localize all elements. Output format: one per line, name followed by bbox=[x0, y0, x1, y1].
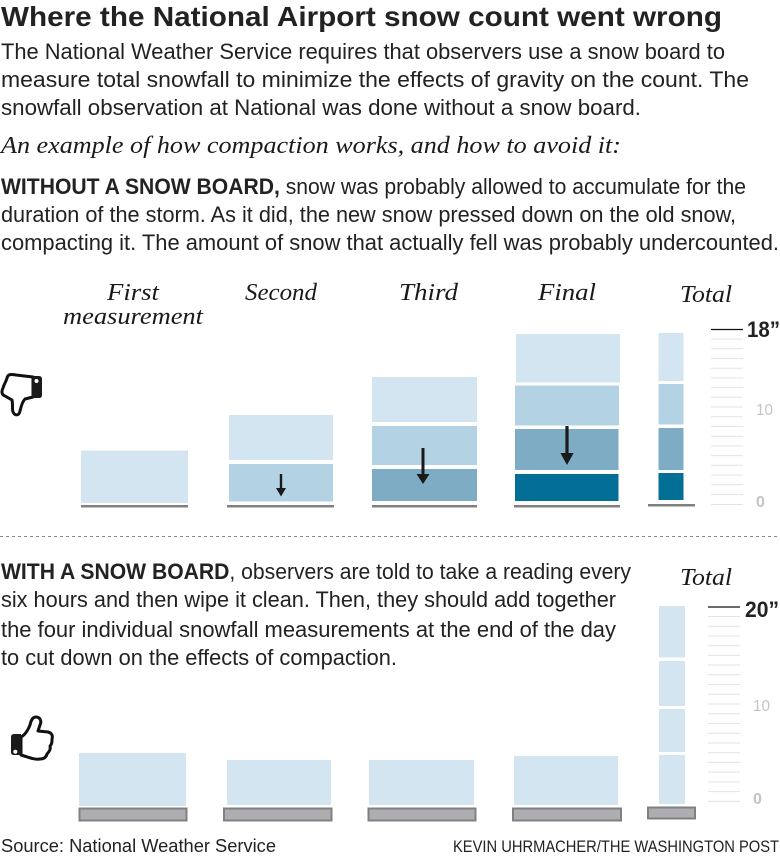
arrow: third compaction bbox=[416, 448, 430, 484]
with a snow board text bbox=[1, 559, 631, 670]
intro text: measure total snowfall to minimize the effects of gravity on the count. The bbox=[1, 67, 749, 92]
chart: first measurement bbox=[81, 450, 188, 508]
column headings bbox=[63, 280, 732, 330]
scale: 20 inches: 10 bbox=[753, 698, 770, 715]
total heading: Total bbox=[680, 565, 732, 591]
intro text: The National Weather Service requires that observers use a snow board to bbox=[1, 39, 725, 64]
column headings: Total bbox=[680, 282, 732, 308]
with a snow board text: to cut down on the effects of compaction. bbox=[1, 645, 397, 670]
column headings: Third bbox=[399, 280, 459, 306]
title: Where the National Airport snow count went wrong bbox=[1, 1, 722, 32]
without a snow board text bbox=[1, 174, 779, 255]
scale: 20 inches bbox=[708, 597, 779, 808]
chart: final measurement bbox=[514, 334, 620, 508]
without a snow board text: WITHOUT A SNOW BOARD, snow was probably allowed to accumulate for the bbox=[1, 174, 746, 199]
scale: 20 inches: 20” bbox=[745, 597, 779, 622]
with a snow board text: WITH A SNOW BOARD, observers are told to take a reading every bbox=[1, 559, 631, 584]
column headings: Second bbox=[245, 280, 318, 306]
without a snow board text: duration of the storm. As it did, the new snow pressed down on the old snow, bbox=[1, 202, 736, 227]
chart: snow board measurements bbox=[79, 753, 621, 820]
column headings: Final bbox=[537, 280, 596, 306]
icon: thumbs up bbox=[11, 717, 52, 759]
subheading: An example of how compaction works, and how to avoid it: bbox=[0, 133, 621, 159]
without a snow board text: compacting it. The amount of snow that actually fell was probably undercounted. bbox=[1, 230, 779, 255]
scale: 18 inches: 0 bbox=[756, 494, 765, 511]
scale: 18 inches bbox=[711, 317, 780, 511]
scale: 18 inches: 10 bbox=[756, 402, 773, 419]
chart: second measurement bbox=[227, 415, 334, 508]
intro text bbox=[1, 39, 749, 120]
chart: total without snow board bbox=[648, 333, 695, 506]
scale: 20 inches: 0 bbox=[753, 791, 762, 808]
icon: thumbs down bbox=[2, 374, 42, 415]
arrow: second compaction bbox=[276, 474, 286, 496]
column headings: First bbox=[106, 280, 160, 306]
column headings: measurement bbox=[63, 304, 204, 330]
with a snow board text: six hours and then wipe it clean. Then, they should add together bbox=[1, 587, 616, 612]
dashed divider bbox=[0, 536, 780, 538]
arrow: final compaction bbox=[560, 426, 574, 465]
with a snow board text: the four individual snowfall measurements at the end of the day bbox=[1, 617, 616, 642]
chart: third measurement bbox=[372, 377, 477, 508]
source: Source: National Weather Service bbox=[1, 836, 276, 856]
chart: total with snow board bbox=[648, 606, 695, 818]
intro text: snowfall observation at National was done without a snow board. bbox=[1, 95, 641, 120]
